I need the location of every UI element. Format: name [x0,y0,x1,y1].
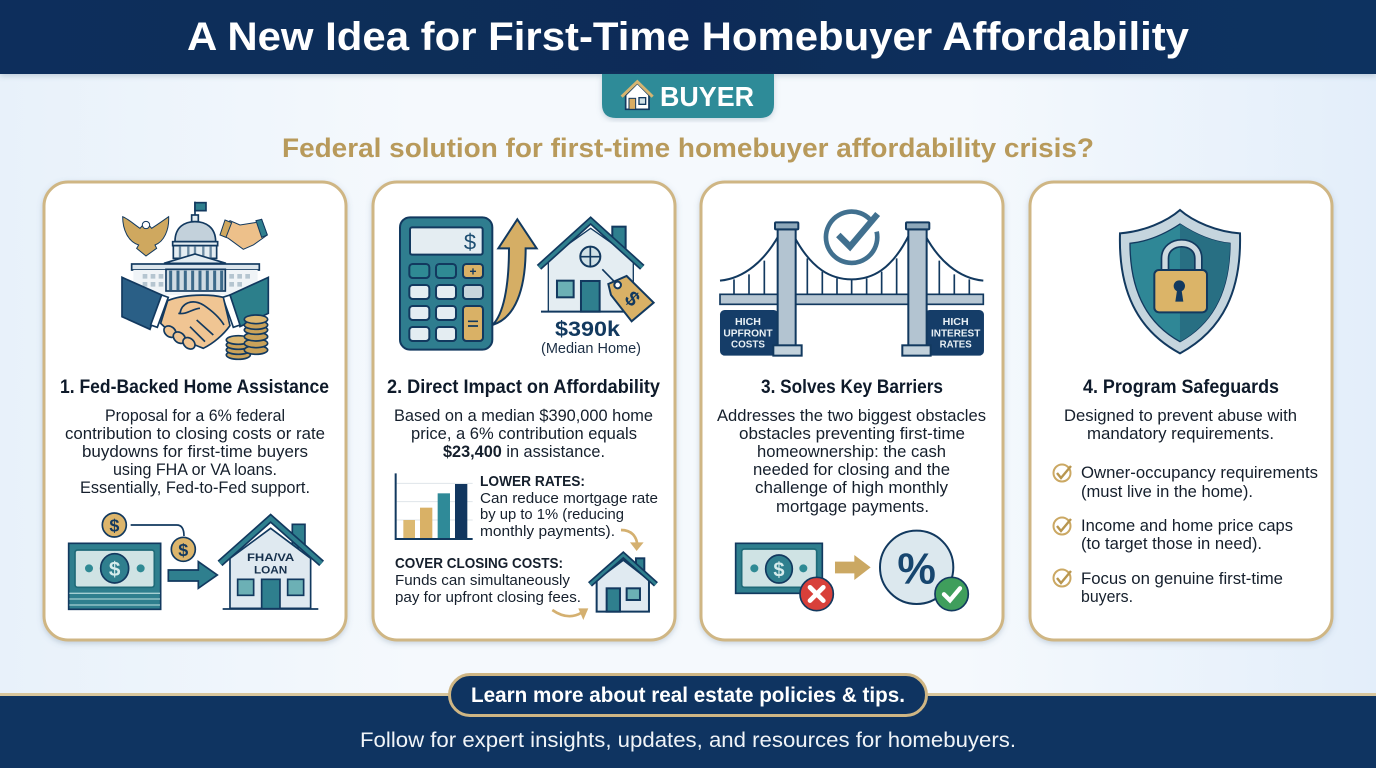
icon: cash rejected, rate approved [736,531,968,611]
body text: homeownership: the cash [757,443,946,461]
icon: bridge over barriers: HICH [735,317,761,328]
body text: contribution to closing costs or rate [65,425,325,443]
icon: bridge over barriers: HICH [943,317,969,328]
icon: capitol and handshake [122,202,268,359]
icon: money flowing to FHA/VA house: $ [178,540,188,560]
body text: mortgage payments. [776,498,929,516]
body text: needed for closing and the [753,461,950,479]
median home label: (Median Home) [541,341,641,357]
body text [394,407,653,461]
icon: cash rejected, rate approved: % [897,545,936,593]
price label: $390k [555,318,620,341]
icon: bridge over barriers: RATES [940,340,972,351]
header band [0,0,1376,74]
safeguard: first-time buyers: Focus on genuine first-time [1081,570,1283,588]
icon: bridge over barriers: INTEREST [931,329,980,340]
safeguard: owner occupancy: (must live in the home). [1081,483,1253,501]
icon: small house with curved arrows [552,530,656,620]
buyer label: BUYER [660,81,754,112]
panel: direct impact on affordability [373,182,675,640]
safeguard: income and price caps: Income and home price caps [1081,517,1293,535]
safeguard: owner occupancy [1054,464,1318,501]
lower rates text: monthly payments). [480,523,615,540]
icon: cash rejected, rate approved: $ [773,559,785,581]
buyer tab [602,74,774,118]
icon: money flowing to FHA/VA house [69,513,322,609]
title: A New Idea for First-Time Homebuyer Affordability [187,15,1190,59]
safeguard: owner occupancy: Owner-occupancy requirements [1081,464,1318,482]
icon: calculator, arrow and priced house [400,217,654,350]
intro text [1064,407,1297,443]
heading: 3. Solves Key Barriers [761,377,943,398]
heading: 4. Program Safeguards [1083,377,1279,398]
icon: money flowing to FHA/VA house: LOAN [254,564,287,576]
icon: calculator, arrow and priced house: + [469,264,476,278]
body text: $23,400 in assistance. [443,443,605,461]
icon: money flowing to FHA/VA house: $ [109,558,121,581]
subheading: Federal solution for first-time homebuyer affordability crisis? [282,133,1094,163]
cover closing costs text: pay for upfront closing fees. [395,589,581,606]
lower rates text: Can reduce mortgage rate [480,490,658,507]
heading: 2. Direct Impact on Affordability [387,377,660,398]
icon: buyer house [622,82,653,109]
body text: Addresses the two biggest obstacles [717,407,986,425]
icon: bridge over barriers: UPFRONT [723,329,773,340]
cover closing costs text: Funds can simultaneously [395,572,570,589]
intro text: Designed to prevent abuse with [1064,407,1297,425]
call to action pill: Learn more about real estate policies & tips. [471,684,905,707]
safeguard: income and price caps [1054,517,1293,553]
lower rates text: by up to 1% (reducing [480,506,624,523]
cover closing costs text: COVER CLOSING COSTS: [395,555,563,572]
body text: Essentially, Fed-to-Fed support. [80,479,310,497]
icon: money flowing to FHA/VA house: FHA/VA [247,552,294,564]
icon: calculator, arrow and priced house: $ [620,287,645,312]
icon: bridge over barriers: COSTS [731,340,766,351]
panel: fed-backed home assistance [44,182,346,640]
lower rates text: LOWER RATES: [480,473,585,490]
body text: buydowns for first-time buyers [82,443,308,461]
body text [717,407,986,516]
heading: 1. Fed-Backed Home Assistance [60,377,329,398]
panel: solves key barriers [701,182,1003,640]
bar chart [396,473,473,539]
footer text: Follow for expert insights, updates, and resources for homebuyers. [360,729,1016,752]
footer band [0,674,1376,768]
body text: using FHA or VA loans. [113,461,277,479]
intro text: mandatory requirements. [1087,425,1274,443]
body text: Based on a median $390,000 home [394,407,653,425]
lower rates text [480,473,658,540]
icon: shield with padlock [1120,210,1240,353]
icon: calculator, arrow and priced house: $ [464,229,476,254]
safeguard: first-time buyers [1054,570,1283,606]
body text: challenge of high monthly [755,479,949,497]
call to action pill [450,674,926,716]
body text: price, a 6% contribution equals [411,425,637,443]
icon: bridge over barriers [720,212,984,356]
body text: obstacles preventing first-time [739,425,965,443]
safeguard: first-time buyers: buyers. [1081,588,1133,606]
body text [65,407,325,497]
body text: Proposal for a 6% federal [105,407,285,425]
panel: program safeguards [1030,182,1332,640]
safeguard: income and price caps: (to target those in need). [1081,535,1262,553]
cover closing costs text [395,555,581,606]
icon: money flowing to FHA/VA house: $ [109,516,119,536]
